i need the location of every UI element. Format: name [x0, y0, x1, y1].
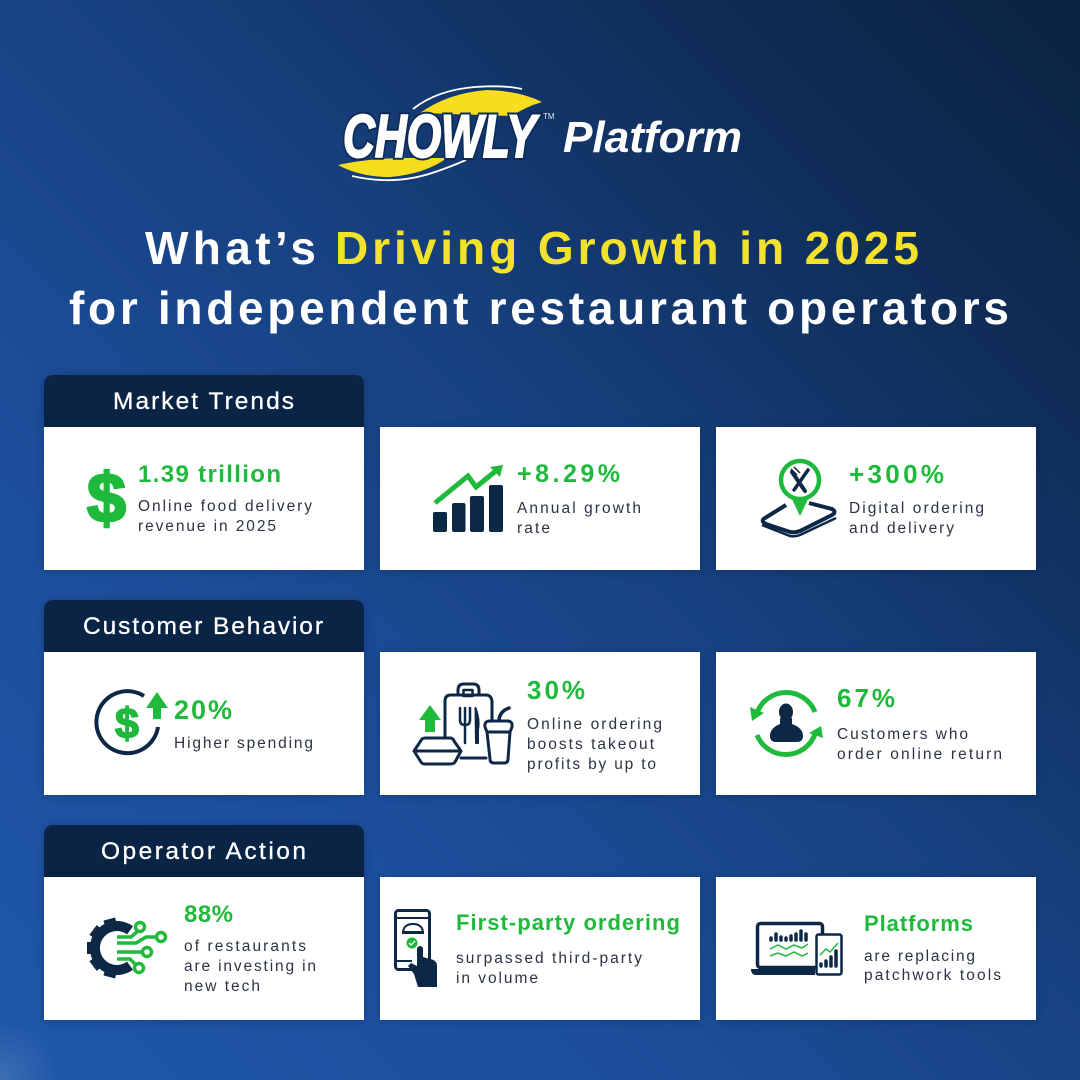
icon: takeout bag, box and cup: [414, 684, 512, 764]
card: First-party ordering: First-party ordering: [456, 910, 680, 935]
card: +300%: [716, 427, 1036, 570]
card: First-party ordering: in volume: [456, 970, 538, 987]
card: 30%: [380, 652, 700, 795]
card: 1.39 trillion: revenue in 2025: [138, 518, 276, 535]
card: 20%: 20%: [174, 695, 232, 725]
card: +300%: +300%: [849, 459, 944, 489]
panel: Market Trends header: Market Trends: [113, 388, 294, 415]
card: +300%: Digital ordering: [849, 500, 984, 517]
card: 30%: profits by up to: [527, 756, 656, 773]
card: First-party ordering: [380, 877, 700, 1020]
panel: Customer Behavior header: Customer Behavior: [83, 613, 323, 640]
icon: laptop and tablet dashboard: [751, 924, 842, 975]
logo swoosh: [338, 86, 542, 180]
card: 30%: boosts takeout: [527, 736, 655, 753]
card: Platforms: patchwork tools: [864, 967, 1001, 984]
card: Platforms: are replacing: [864, 948, 975, 965]
card: 67%: order online return: [837, 746, 1002, 763]
trademark: TM: [543, 112, 555, 121]
logo wordmark: CHOWLY: [343, 103, 540, 170]
card: 1.39 trillion: 1.39 trillion: [138, 461, 281, 488]
icon: dollar sign: $: [87, 459, 126, 537]
title line 1: What’s: [145, 222, 316, 274]
card: 67%: 67%: [837, 683, 895, 713]
card: 30%: Online ordering: [527, 716, 662, 733]
card: 88%: are investing in: [184, 958, 316, 975]
panel: Operator Action header: [44, 825, 364, 877]
title: [69, 222, 1009, 334]
card: +300%: and delivery: [849, 520, 954, 537]
icon: delivery location pin on tablet: [762, 461, 836, 536]
logo wordmark: CHOWLY: [343, 103, 540, 170]
card: 88%: [44, 877, 364, 1020]
icon: gear with circuits: [87, 917, 166, 979]
title highlight: Driving Growth in 2025: [335, 222, 919, 274]
card: First-party ordering: surpassed third-party: [456, 950, 642, 967]
panel: Customer Behavior header: [44, 600, 364, 652]
card: 1.39 trillion: Online food delivery: [138, 498, 312, 515]
panel: Market Trends header: [44, 375, 364, 427]
icon: phone with tapping hand: [396, 910, 437, 987]
card: 88%: of restaurants: [184, 938, 306, 955]
card: +8.29%: +8.29%: [517, 460, 620, 488]
icon: returning customer: [750, 692, 823, 755]
card: +8.29%: Annual growth: [517, 500, 641, 517]
card: 30%: 30%: [527, 675, 585, 705]
logo Platform: Platform: [563, 113, 742, 162]
logo: Chowly Platform: [338, 86, 742, 180]
card: Platforms: [716, 877, 1036, 1020]
card: 88%: new tech: [184, 978, 260, 995]
card: 1.39 trillion: [44, 427, 364, 570]
icon: spending up: [96, 691, 168, 753]
card: 20%: Higher spending: [174, 735, 313, 752]
panel: Operator Action header: Operator Action: [101, 838, 306, 865]
card: +8.29%: rate: [517, 520, 550, 537]
card: 88%: 88%: [184, 901, 233, 928]
card: +8.29%: [380, 427, 700, 570]
card: 20%: [44, 652, 364, 795]
card: Platforms: Platforms: [864, 911, 973, 936]
icon: growth chart: [433, 465, 503, 532]
icon: spending up: $: [115, 700, 139, 748]
title line 2: for independent restaurant operators: [69, 282, 1009, 334]
card: 67%: [716, 652, 1036, 795]
card: 67%: Customers who: [837, 726, 968, 743]
